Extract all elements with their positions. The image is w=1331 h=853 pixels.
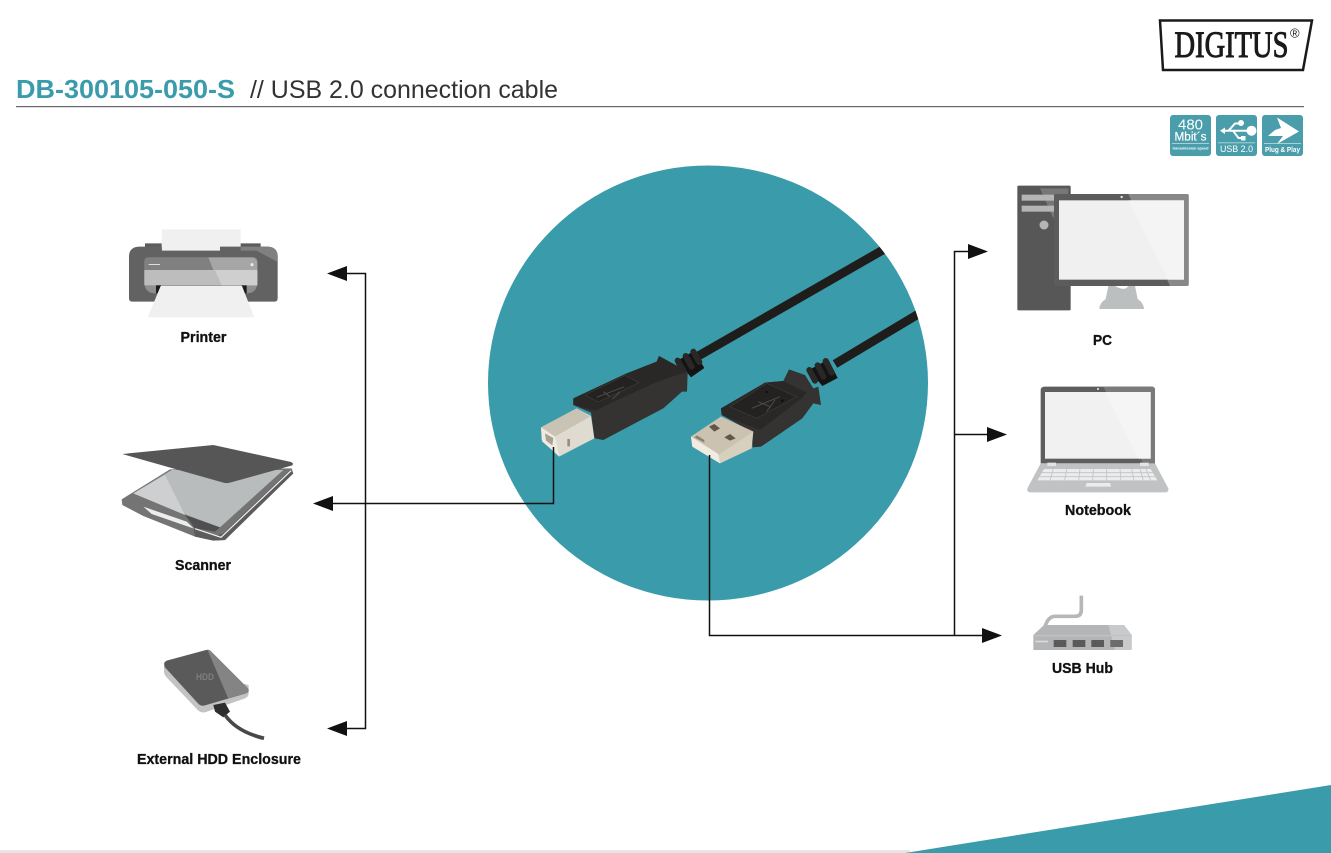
arrows: cable B to printer, scanner, HDD	[313, 266, 554, 736]
title	[16, 76, 1304, 107]
icon: printer	[129, 229, 278, 317]
icon: notebook	[1027, 387, 1168, 492]
bottom decoration: teal wedge	[0, 785, 1331, 853]
title: DB-300105-050-S	[16, 76, 235, 104]
badge: 480 Mbit/s: Mbit´s	[1174, 132, 1207, 144]
label: USB Hub: USB Hub	[1052, 661, 1113, 677]
badge: 480 Mbit/s	[1170, 115, 1211, 156]
title: // USB 2.0 connection cable	[250, 76, 558, 104]
label: Printer: Printer	[180, 330, 227, 346]
logo: DIGITUS: DIGITUS	[1174, 24, 1288, 65]
label: PC: PC	[1093, 333, 1112, 349]
badge: Plug & Play: Plug & Play	[1265, 147, 1300, 154]
badge: USB 2.0: USB 2.0	[1220, 144, 1253, 155]
cables	[693, 243, 930, 364]
usb cable photo	[541, 243, 930, 463]
icon: PC	[1017, 186, 1189, 310]
icon: external HDD: HDD	[196, 672, 214, 682]
label: Notebook: Notebook	[1065, 503, 1132, 519]
label: Scanner: Scanner	[175, 558, 231, 574]
label: External HDD Enclosure: External HDD Enclosure	[137, 752, 301, 768]
badge: 480 Mbit/s: transmission speed	[1172, 146, 1209, 150]
teal circle	[488, 166, 928, 600]
logo: DIGITUS: ®	[1290, 26, 1300, 40]
icon: external HDD	[164, 650, 264, 738]
icon: scanner	[122, 445, 293, 541]
arrows: cable A to PC, notebook, USB hub	[710, 244, 1007, 643]
badge: 480 Mbit/s: 480	[1178, 116, 1203, 134]
connector: USB-A plug	[691, 359, 838, 463]
badge: Plug & Play	[1262, 115, 1303, 156]
badge: USB 2.0	[1216, 115, 1257, 156]
connector: USB-B plug	[541, 351, 704, 457]
icon: USB hub	[1033, 596, 1132, 650]
